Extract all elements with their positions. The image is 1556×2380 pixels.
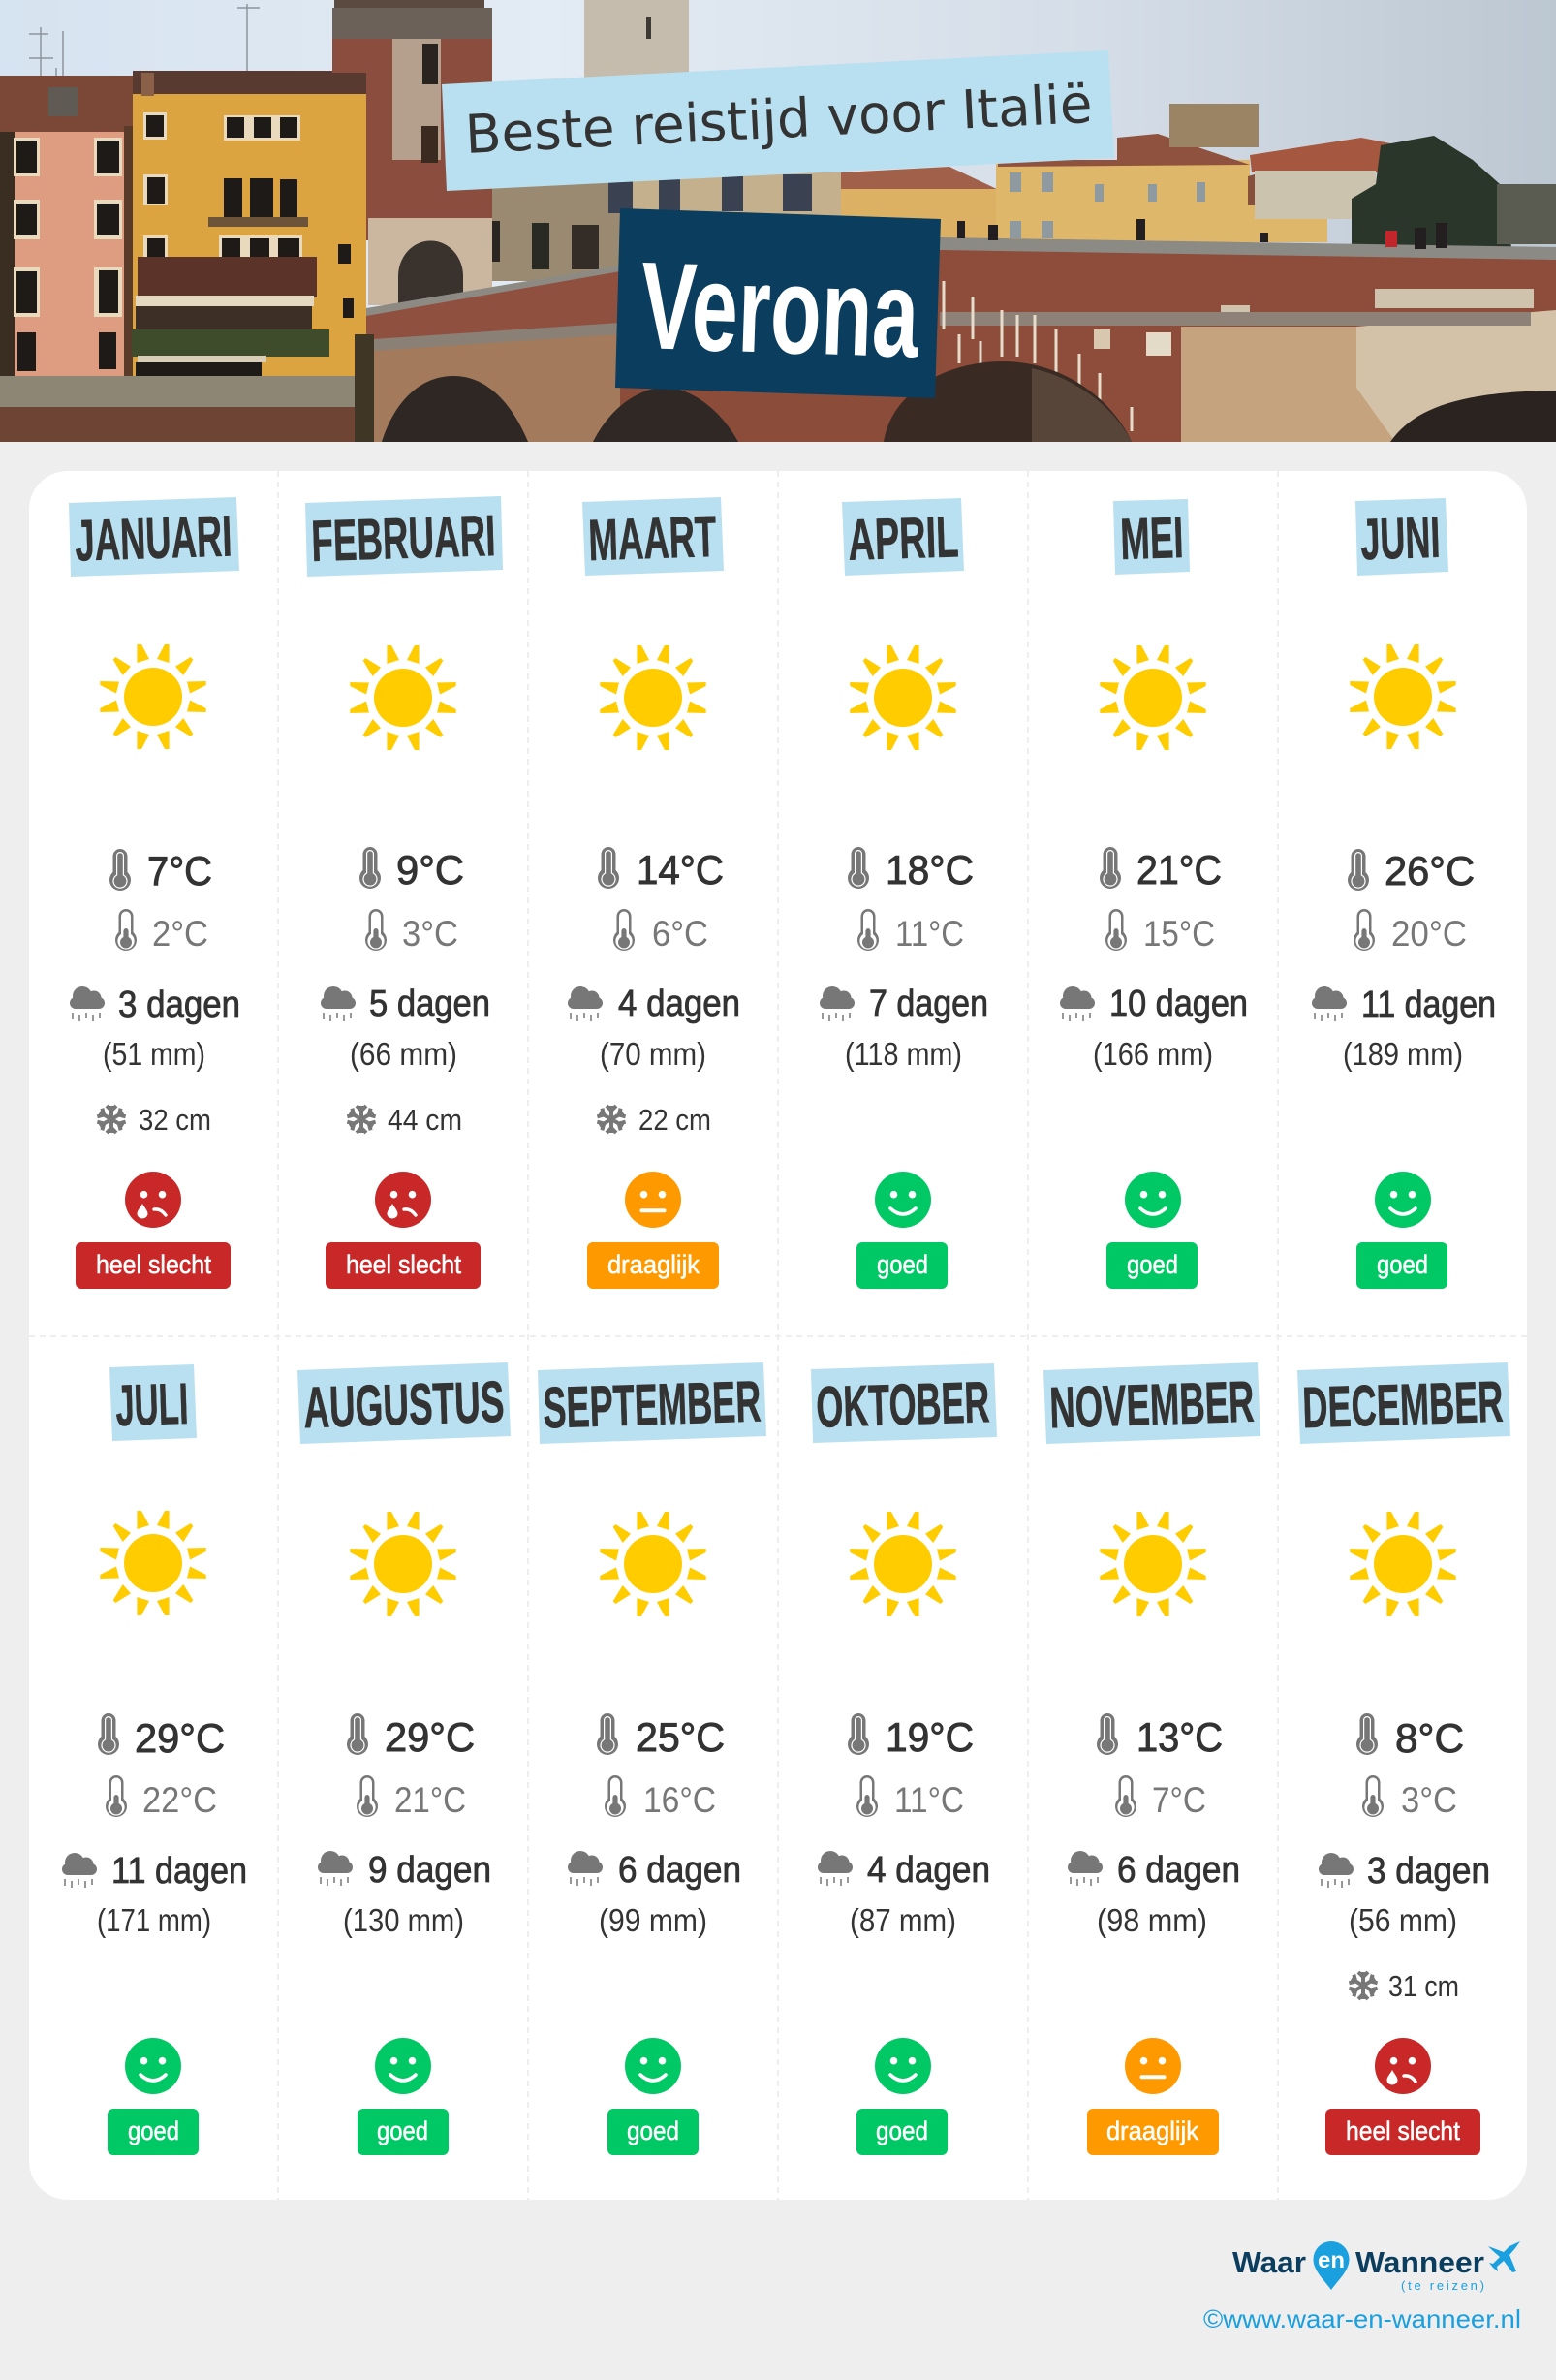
icon: low temperature bbox=[1115, 1775, 1136, 1817]
rating badge bbox=[1087, 2109, 1219, 2155]
logo word en: en bbox=[1318, 2247, 1345, 2272]
rain days: 6 dagen bbox=[1117, 1850, 1240, 1891]
high temperature: 29°C bbox=[135, 1715, 225, 1761]
high temperature: 18°C bbox=[886, 847, 974, 892]
rain days: 5 dagen bbox=[369, 984, 490, 1024]
month label bbox=[109, 1364, 197, 1441]
icon: low temperature bbox=[365, 909, 387, 951]
month label bbox=[842, 498, 964, 576]
month label bbox=[305, 496, 503, 577]
rainfall: (171 mm) bbox=[97, 1902, 211, 1938]
logo word Wanneer: Wanneer bbox=[1355, 2245, 1484, 2279]
rating badge bbox=[1106, 1242, 1198, 1289]
rain days: 10 dagen bbox=[1109, 984, 1248, 1024]
rating face bbox=[625, 2038, 681, 2094]
panel: februari bbox=[305, 496, 503, 1289]
icon: high temperature bbox=[109, 849, 131, 891]
white card bbox=[29, 471, 1527, 2200]
icon: map pin bbox=[1314, 2241, 1349, 2290]
low temperature: 2°C bbox=[152, 914, 208, 954]
icon: snow bbox=[347, 1106, 376, 1133]
panel: juli bbox=[62, 1364, 247, 2155]
icon: sun bbox=[100, 1511, 206, 1615]
icon: snow bbox=[1349, 1972, 1378, 1999]
high temperature: 19°C bbox=[886, 1714, 974, 1760]
title banner: Beste reistijd voor Italië bbox=[463, 73, 1094, 166]
icon: high temperature bbox=[848, 847, 869, 889]
icon: low temperature bbox=[857, 909, 879, 951]
icon: airplane bbox=[1488, 2241, 1520, 2272]
title banner bbox=[442, 50, 1114, 191]
rating badge bbox=[1356, 1242, 1447, 1289]
month label: AUGUSTUS bbox=[302, 1369, 505, 1440]
high temperature: 29°C bbox=[385, 1714, 475, 1760]
rating badge: heel slecht bbox=[346, 1250, 461, 1279]
icon: high temperature bbox=[598, 847, 619, 889]
rating badge: heel slecht bbox=[1346, 2116, 1460, 2145]
icon: sun bbox=[1350, 644, 1456, 749]
rating badge: draaglijk bbox=[607, 1250, 700, 1279]
month label bbox=[811, 1363, 997, 1443]
rating badge bbox=[76, 1242, 231, 1289]
rain days: 3 dagen bbox=[118, 985, 240, 1025]
logo: Waar en Wanneer: Waar bbox=[1232, 2245, 1306, 2279]
rating badge: draaglijk bbox=[1106, 2116, 1198, 2145]
low temperature: 6°C bbox=[652, 914, 708, 954]
icon: rain bbox=[62, 1853, 97, 1888]
rating face bbox=[1375, 1172, 1431, 1228]
icon: low temperature bbox=[1105, 909, 1127, 951]
icon: sun bbox=[100, 644, 206, 749]
low temperature: 3°C bbox=[1401, 1780, 1457, 1820]
panel: juni bbox=[1312, 498, 1496, 1289]
rating face bbox=[375, 2038, 431, 2094]
icon: sun bbox=[600, 645, 706, 750]
icon: sun bbox=[1100, 645, 1206, 750]
header photo: Ponte Pietra Verona bbox=[0, 0, 1556, 442]
icon: rain bbox=[1068, 1851, 1103, 1886]
rain days: 11 dagen bbox=[111, 1851, 247, 1892]
low temperature: 3°C bbox=[402, 914, 458, 954]
rating face bbox=[1125, 2038, 1181, 2094]
rating badge: goed bbox=[377, 2116, 428, 2145]
month label bbox=[69, 497, 239, 577]
rain days: 11 dagen bbox=[1361, 985, 1496, 1025]
website url: ©www.waar-en-wanneer.nl bbox=[1203, 2304, 1521, 2333]
icon: rain bbox=[321, 986, 356, 1021]
logo tagline: (te reizen) bbox=[1401, 2278, 1484, 2293]
icon: rain bbox=[1060, 986, 1095, 1021]
low temperature: 7°C bbox=[1152, 1780, 1206, 1820]
rain days: 3 dagen bbox=[1367, 1851, 1490, 1892]
rainfall: (56 mm) bbox=[1349, 1902, 1457, 1938]
icon: low temperature bbox=[1362, 1775, 1384, 1817]
icon: high temperature bbox=[1097, 1713, 1118, 1755]
rating badge: goed bbox=[1377, 1250, 1428, 1279]
rating badge bbox=[856, 2109, 948, 2155]
rating badge bbox=[326, 1242, 481, 1289]
icon: low temperature bbox=[115, 909, 137, 951]
rating badge bbox=[358, 2109, 449, 2155]
icon: low temperature bbox=[106, 1775, 127, 1817]
month label: OKTOBER bbox=[815, 1369, 990, 1440]
snowfall: 32 cm bbox=[139, 1103, 211, 1137]
month label bbox=[1113, 499, 1190, 575]
city name banner: Verona bbox=[638, 236, 921, 385]
panel: oktober bbox=[811, 1363, 997, 2155]
icon: sun bbox=[350, 1512, 456, 1616]
icon: rain bbox=[820, 986, 855, 1021]
icon: high temperature bbox=[597, 1713, 618, 1755]
rain days: 4 dagen bbox=[618, 984, 740, 1024]
icon: high temperature bbox=[347, 1713, 368, 1755]
icon: high temperature bbox=[98, 1713, 119, 1755]
rating badge: goed bbox=[1127, 1250, 1178, 1279]
month label bbox=[1043, 1362, 1260, 1444]
panel: januari bbox=[69, 497, 240, 1289]
rainfall: (98 mm) bbox=[1097, 1902, 1207, 1938]
high temperature: 13°C bbox=[1136, 1714, 1223, 1760]
icon: rain bbox=[70, 986, 105, 1021]
panel: november bbox=[1043, 1362, 1260, 2155]
month label bbox=[297, 1362, 511, 1444]
rating face bbox=[125, 1172, 181, 1228]
icon: low temperature bbox=[856, 1775, 878, 1817]
rainfall: (51 mm) bbox=[103, 1036, 205, 1072]
icon: sun bbox=[600, 1512, 706, 1616]
month label bbox=[538, 1362, 766, 1444]
month label bbox=[582, 497, 724, 576]
month label: FEBRUARI bbox=[310, 503, 496, 574]
icon: snow bbox=[97, 1106, 126, 1133]
rating face bbox=[875, 2038, 931, 2094]
rating face bbox=[1375, 2038, 1431, 2094]
month label: JULI bbox=[114, 1371, 189, 1438]
rainfall: (166 mm) bbox=[1093, 1036, 1213, 1072]
rating badge: goed bbox=[877, 1250, 928, 1279]
icon: high temperature bbox=[848, 1713, 869, 1755]
low temperature: 22°C bbox=[142, 1780, 217, 1820]
icon: sun bbox=[850, 1512, 956, 1616]
icon: low temperature bbox=[1354, 909, 1375, 951]
high temperature: 9°C bbox=[396, 847, 464, 892]
rainfall: (87 mm) bbox=[850, 1902, 956, 1938]
panel: mei bbox=[1060, 499, 1248, 1289]
rating badge: goed bbox=[627, 2116, 679, 2145]
rating badge: heel slecht bbox=[96, 1250, 211, 1279]
rainfall: (118 mm) bbox=[845, 1036, 962, 1072]
icon: low temperature bbox=[357, 1775, 378, 1817]
rating face bbox=[375, 1172, 431, 1228]
low temperature: 11°C bbox=[895, 914, 964, 954]
month label: SEPTEMBER bbox=[542, 1368, 762, 1441]
rainfall: (66 mm) bbox=[350, 1036, 457, 1072]
high temperature: 21°C bbox=[1136, 847, 1222, 892]
rainfall: (70 mm) bbox=[600, 1036, 706, 1072]
panel: april bbox=[820, 498, 988, 1289]
snowfall: 31 cm bbox=[1388, 1969, 1459, 2003]
snowfall: 44 cm bbox=[388, 1103, 462, 1137]
high temperature: 26°C bbox=[1385, 848, 1475, 893]
month label bbox=[1355, 498, 1448, 576]
snowfall: 22 cm bbox=[638, 1103, 711, 1137]
rating badge bbox=[108, 2109, 199, 2155]
icon: sun bbox=[850, 645, 956, 750]
rating badge: goed bbox=[876, 2116, 928, 2145]
rating badge bbox=[1325, 2109, 1480, 2155]
icon: sun bbox=[1350, 1512, 1456, 1616]
icon: low temperature bbox=[613, 909, 635, 951]
high temperature: 25°C bbox=[636, 1714, 725, 1760]
month label: NOVEMBER bbox=[1048, 1369, 1255, 1440]
high temperature: 14°C bbox=[637, 847, 724, 892]
month label: JANUARI bbox=[74, 503, 233, 574]
month label: MAART bbox=[587, 504, 717, 573]
low temperature: 15°C bbox=[1143, 914, 1215, 954]
icon: rain bbox=[318, 1851, 353, 1886]
icon: snow bbox=[597, 1106, 626, 1133]
high temperature: 7°C bbox=[147, 848, 212, 893]
low temperature: 16°C bbox=[643, 1780, 716, 1820]
rainfall: (130 mm) bbox=[343, 1902, 464, 1938]
icon: rain bbox=[568, 986, 603, 1021]
rating badge bbox=[587, 1242, 719, 1289]
rating badge bbox=[856, 1242, 948, 1289]
panel: augustus bbox=[297, 1362, 511, 2155]
month label: JUNI bbox=[1359, 505, 1441, 572]
panel: maart bbox=[568, 497, 740, 1289]
icon: high temperature bbox=[1356, 1713, 1378, 1755]
rating face bbox=[625, 1172, 681, 1228]
icon: high temperature bbox=[1348, 849, 1369, 891]
logo: Waar en Wanneer bbox=[1232, 2241, 1520, 2293]
high temperature: 8°C bbox=[1395, 1715, 1464, 1761]
rating badge: goed bbox=[128, 2116, 179, 2145]
month label: MEI bbox=[1119, 505, 1184, 572]
panel: september bbox=[538, 1362, 766, 2155]
city name banner bbox=[615, 208, 941, 398]
icon: high temperature bbox=[1100, 847, 1121, 889]
rating badge bbox=[607, 2109, 699, 2155]
icon: high temperature bbox=[359, 847, 381, 889]
rain days: 4 dagen bbox=[867, 1850, 990, 1891]
rain days: 7 dagen bbox=[869, 984, 988, 1024]
icon: low temperature bbox=[605, 1775, 626, 1817]
icon: rain bbox=[568, 1851, 603, 1886]
icon: sun bbox=[350, 645, 456, 750]
rainfall: (189 mm) bbox=[1343, 1036, 1463, 1072]
month label: APRIL bbox=[847, 504, 959, 573]
low temperature: 21°C bbox=[394, 1780, 466, 1820]
rainfall: (99 mm) bbox=[599, 1902, 707, 1938]
icon: rain bbox=[818, 1851, 853, 1886]
panel: december bbox=[1297, 1362, 1510, 2155]
rain days: 6 dagen bbox=[618, 1850, 741, 1891]
icon: rain bbox=[1312, 986, 1347, 1021]
rating face bbox=[125, 2038, 181, 2094]
icon: sun bbox=[1100, 1512, 1206, 1616]
icon: rain bbox=[1319, 1853, 1354, 1888]
rating face bbox=[1125, 1172, 1181, 1228]
low temperature: 20°C bbox=[1391, 914, 1467, 954]
rain days: 9 dagen bbox=[368, 1850, 491, 1891]
rating face bbox=[875, 1172, 931, 1228]
low temperature: 11°C bbox=[894, 1780, 964, 1820]
